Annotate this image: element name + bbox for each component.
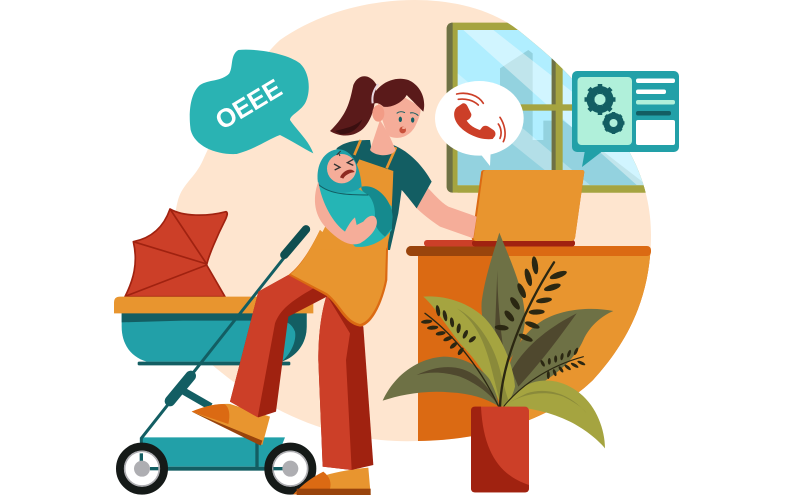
leaf: left upper <box>423 296 515 407</box>
panel: gear card <box>572 71 679 167</box>
hair tie <box>372 84 378 103</box>
basket <box>122 313 307 365</box>
eyes <box>399 117 414 123</box>
background blob <box>173 0 651 441</box>
head <box>330 76 424 155</box>
arm <box>415 187 477 238</box>
desk top <box>406 246 651 256</box>
baby hair <box>337 151 341 156</box>
potted plant <box>383 233 613 492</box>
speech bubble: baby cry <box>190 50 313 154</box>
leaf: back center <box>481 233 525 367</box>
mouth <box>399 127 406 133</box>
icon: ringing waves <box>457 93 505 142</box>
branches <box>425 262 583 407</box>
right leg <box>318 295 373 470</box>
leaflets <box>421 256 586 379</box>
baby wrap fold <box>361 186 393 237</box>
neck <box>370 120 396 155</box>
shirt <box>330 140 432 250</box>
ponytail <box>330 76 377 136</box>
leaf: right back <box>509 309 613 400</box>
face <box>378 97 421 138</box>
wheel right <box>268 447 312 491</box>
window <box>447 23 653 193</box>
legs and shoes <box>192 275 373 495</box>
bassinet rim <box>114 297 313 313</box>
left shoe <box>192 404 270 446</box>
canopy <box>125 209 227 297</box>
leaf: left lower <box>383 357 499 407</box>
apron <box>288 140 396 327</box>
baby <box>315 149 393 247</box>
leaf: right lower <box>503 380 605 448</box>
speech bubble: baby cry: OEEE <box>210 73 287 136</box>
speech bubble: phone <box>435 81 524 166</box>
baby hood <box>317 149 362 193</box>
frame tray <box>140 437 287 471</box>
desk <box>406 246 660 444</box>
stroller handle <box>141 229 306 443</box>
woman <box>192 76 477 495</box>
baby face <box>327 154 356 183</box>
eyebrows <box>397 112 418 116</box>
ear <box>372 105 384 122</box>
wheel left <box>120 447 164 491</box>
right shoe <box>293 468 371 495</box>
icon: phone handset <box>454 103 495 139</box>
pot <box>471 407 529 492</box>
left leg <box>230 275 330 417</box>
stroller <box>114 209 313 491</box>
hair <box>373 79 424 112</box>
mother's forearm <box>315 182 377 244</box>
icon: gears <box>584 84 624 134</box>
laptop <box>424 170 584 246</box>
baby wrap <box>318 182 392 247</box>
